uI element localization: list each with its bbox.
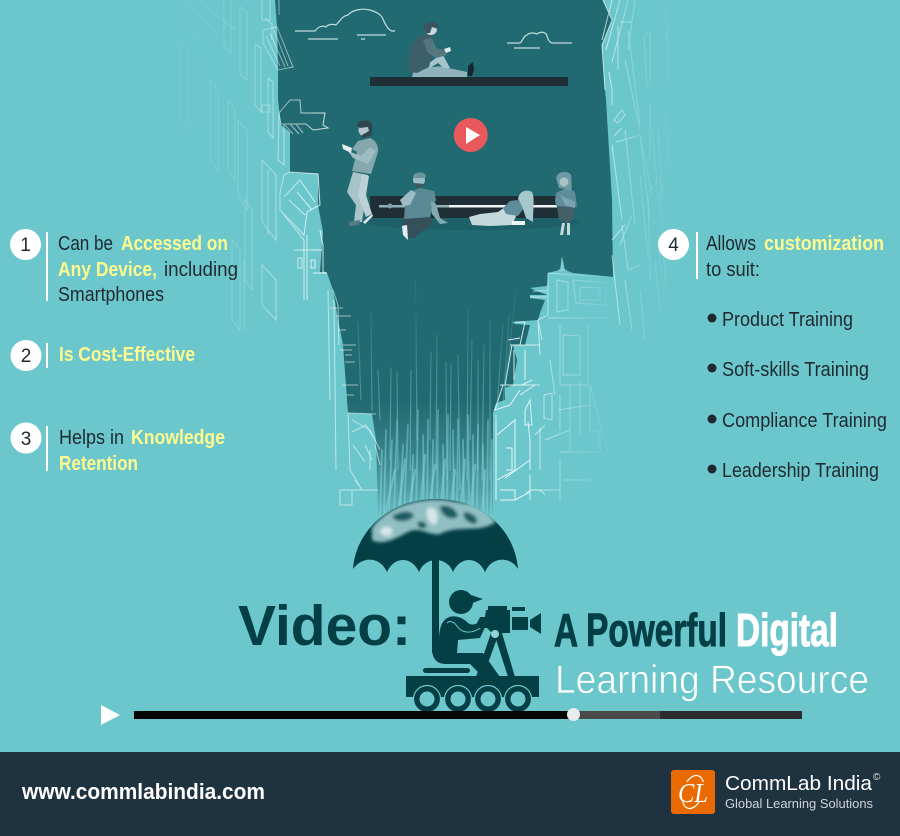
progress bar [101, 705, 802, 725]
cloud: large [295, 9, 395, 39]
footer band [0, 752, 900, 836]
person: seated on top bar [409, 22, 474, 77]
title: A Powerful Digital: Digital [736, 604, 838, 656]
point 3: 3 [21, 429, 31, 450]
right building line art [602, 0, 670, 340]
point 4: Allows [706, 233, 756, 255]
umbrella [353, 499, 518, 653]
point 1: Can be [58, 233, 113, 255]
point 4: 4 [668, 235, 679, 256]
video control bar [370, 196, 570, 218]
training list: Compliance Training [722, 410, 887, 432]
point 1: Any Device, [58, 259, 157, 281]
dolly wheels [414, 686, 532, 712]
rain streaks [358, 280, 516, 515]
point 2: Is Cost-Effective [59, 344, 195, 366]
logo mark: CL [678, 778, 708, 808]
shadow below the people [364, 214, 580, 230]
play button [454, 118, 488, 152]
logo wordmark [725, 772, 881, 811]
point 1 [10, 229, 238, 306]
point 2 [10, 340, 195, 371]
logo mark [671, 770, 715, 814]
point 4 [658, 229, 884, 281]
left building line art [130, 0, 328, 330]
point 4: customization [764, 233, 884, 255]
point 1: Smartphones [58, 284, 164, 306]
umbrella cloud texture [372, 500, 496, 542]
title: Learning Resource: Learning Resource [555, 658, 869, 702]
point 4: to suit: [706, 259, 760, 281]
top video bar [370, 77, 568, 86]
logo wordmark: Global Learning Solutions [725, 796, 873, 811]
point 2: 2 [21, 346, 31, 367]
point 3: Helps in [59, 427, 124, 449]
person: seated with beard [400, 172, 448, 240]
training list [708, 309, 887, 482]
title: Video: Video: [238, 594, 411, 658]
lower right building line art [495, 257, 615, 500]
point 1: Accessed on [121, 233, 228, 255]
point 3 [10, 422, 225, 475]
point 3: Retention [59, 453, 138, 475]
logo wordmark: CommLab India [725, 773, 873, 795]
point 1: 1 [20, 235, 31, 256]
night sky street gap [275, 0, 613, 515]
cloud: small [507, 32, 572, 48]
person: standing with phone [342, 120, 378, 226]
person: woman seated [555, 172, 577, 235]
training list: Leadership Training [722, 460, 879, 482]
point 1: including [164, 259, 238, 281]
lower left building line art [328, 290, 380, 505]
point 3: Knowledge [131, 427, 225, 449]
training list: Product Training [722, 309, 853, 331]
camera operator on dolly [406, 590, 541, 697]
title: A Powerful Digital: A Powerful [554, 604, 727, 656]
logo wordmark: © [873, 772, 881, 783]
website url: www.commlabindia.com [21, 779, 265, 804]
training list: Soft-skills Training [722, 359, 869, 381]
person: lying with tablet [469, 191, 534, 226]
